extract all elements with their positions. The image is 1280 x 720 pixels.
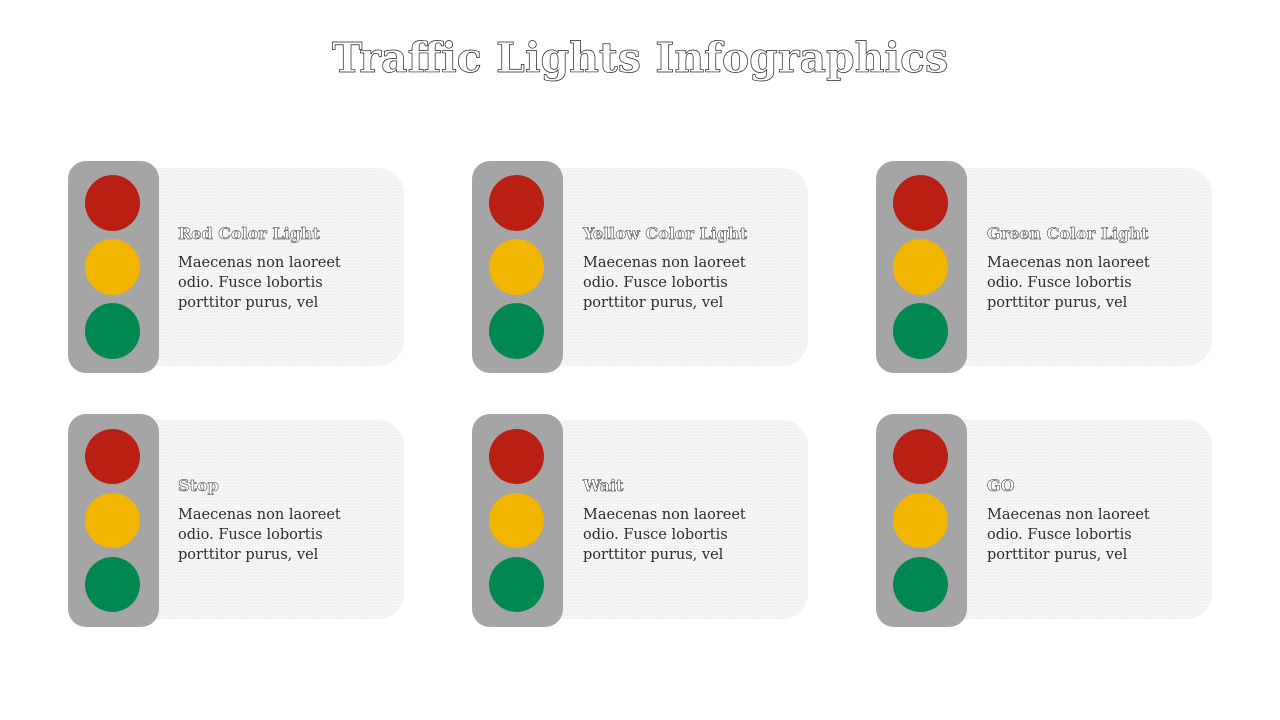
card: yellow color light bbox=[472, 161, 808, 373]
body text: porttitor purus, vel bbox=[178, 547, 318, 563]
text panel background bbox=[148, 168, 404, 366]
body text: Maecenas non laoreet bbox=[987, 507, 1150, 523]
text panel background bbox=[956, 168, 1212, 366]
traffic light bbox=[68, 414, 159, 627]
body text bbox=[987, 255, 1150, 311]
body text: porttitor purus, vel bbox=[583, 295, 723, 311]
text panel background bbox=[552, 420, 808, 619]
body text: odio. Fusce lobortis bbox=[583, 275, 728, 291]
body text: Maecenas non laoreet bbox=[987, 255, 1150, 271]
body text: odio. Fusce lobortis bbox=[987, 275, 1132, 291]
body text: porttitor purus, vel bbox=[583, 547, 723, 563]
card: stop bbox=[68, 414, 404, 627]
heading: Red Color Light bbox=[178, 224, 320, 243]
heading: Wait bbox=[583, 476, 623, 495]
card: green color light bbox=[876, 161, 1212, 373]
card: wait bbox=[472, 414, 808, 627]
body text: Maecenas non laoreet bbox=[178, 255, 341, 271]
body text: odio. Fusce lobortis bbox=[987, 527, 1132, 543]
body text: odio. Fusce lobortis bbox=[583, 527, 728, 543]
heading: Green Color Light bbox=[987, 224, 1148, 243]
body text: Maecenas non laoreet bbox=[178, 507, 341, 523]
heading: Yellow Color Light bbox=[583, 224, 747, 243]
body text bbox=[178, 255, 341, 311]
traffic light bbox=[876, 414, 967, 627]
heading: Stop bbox=[178, 476, 219, 495]
body text bbox=[583, 507, 746, 563]
card: go bbox=[876, 414, 1212, 627]
body text: Maecenas non laoreet bbox=[583, 255, 746, 271]
body text: odio. Fusce lobortis bbox=[178, 275, 323, 291]
text panel background bbox=[148, 420, 404, 619]
card: red color light bbox=[68, 161, 404, 373]
body text: porttitor purus, vel bbox=[987, 295, 1127, 311]
body text bbox=[583, 255, 746, 311]
body text: Maecenas non laoreet bbox=[583, 507, 746, 523]
traffic light bbox=[876, 161, 967, 373]
body text: porttitor purus, vel bbox=[178, 295, 318, 311]
title: Traffic Lights Infographics bbox=[332, 34, 948, 82]
traffic light bbox=[472, 414, 563, 627]
body text bbox=[178, 507, 341, 563]
heading: GO bbox=[987, 476, 1015, 495]
body text bbox=[987, 507, 1150, 563]
body text: odio. Fusce lobortis bbox=[178, 527, 323, 543]
traffic light bbox=[68, 161, 159, 373]
traffic light bbox=[472, 161, 563, 373]
body text: porttitor purus, vel bbox=[987, 547, 1127, 563]
text panel background bbox=[956, 420, 1212, 619]
text panel background bbox=[552, 168, 808, 366]
